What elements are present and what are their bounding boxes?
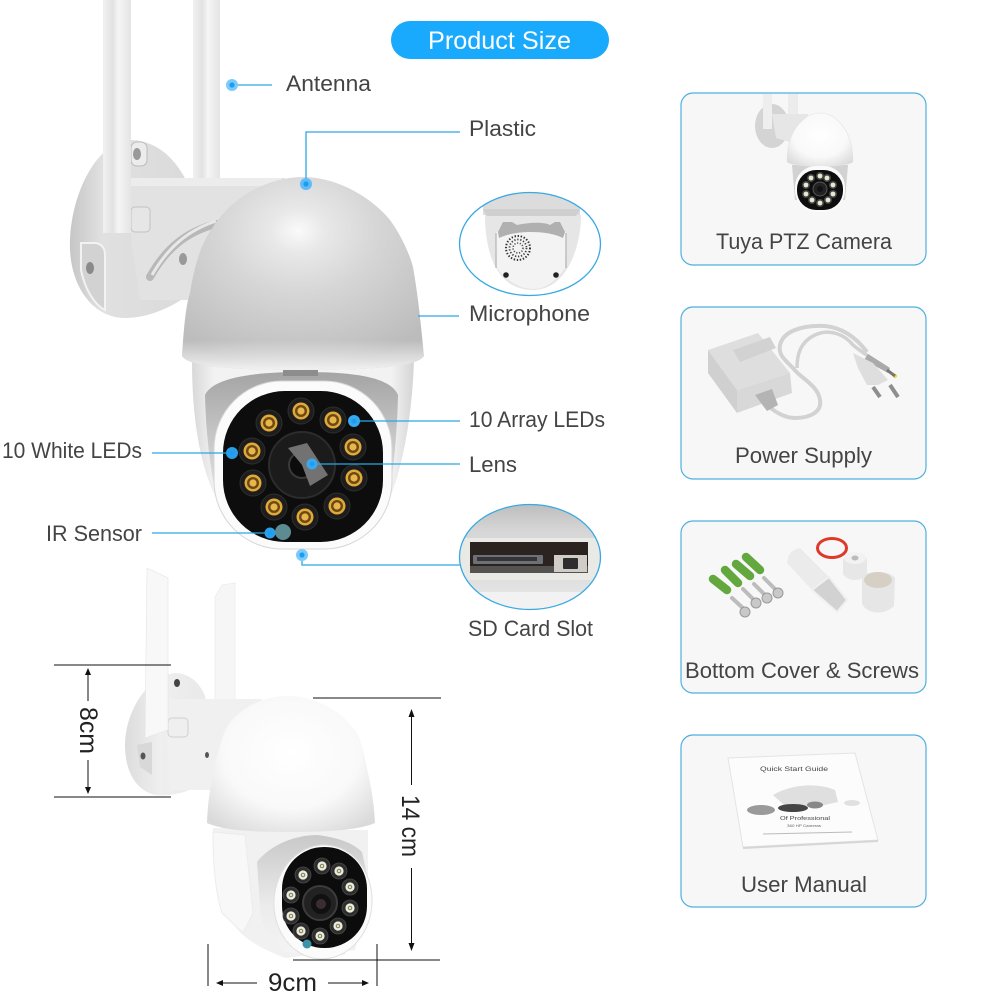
callout: white LEDs xyxy=(2,438,238,463)
screws and anchors image xyxy=(713,538,895,617)
callout: 10 array LEDs xyxy=(348,407,605,432)
IR sensor xyxy=(275,524,291,540)
back antenna xyxy=(215,583,235,700)
white LEDs ring xyxy=(239,398,367,530)
callout: plastic: Plastic xyxy=(469,116,536,141)
panel: Tuya PTZ camera xyxy=(681,93,926,265)
speaker holes xyxy=(506,236,530,260)
manual booklet image: Of Professional xyxy=(780,816,830,822)
callout: 10 array LEDs: 10 Array LEDs xyxy=(469,407,605,432)
panel: bottom cover and screws xyxy=(681,521,926,693)
mini camera image xyxy=(755,94,853,212)
wall mount plate xyxy=(70,0,285,318)
callout: plastic xyxy=(300,116,536,190)
panel: user manual: User Manual xyxy=(741,872,867,897)
callout: lens xyxy=(306,452,517,477)
product size pill heading xyxy=(391,21,609,59)
front antenna xyxy=(145,568,168,738)
manual booklet image: Quick Start Guide xyxy=(760,766,828,773)
dimension: 14 cm depth xyxy=(293,698,441,960)
panel: user manual xyxy=(681,735,926,907)
callout: SD card slot: SD Card Slot xyxy=(468,616,593,641)
dome shell xyxy=(182,177,424,370)
dimension: 8cm height: 8cm xyxy=(74,707,102,754)
panel: power supply xyxy=(681,307,926,479)
callout: IR sensor: IR Sensor xyxy=(46,521,142,546)
dimension: 14 cm depth: 14 cm xyxy=(396,795,424,857)
power adapter image xyxy=(708,326,898,418)
manual booklet image: 360 HP Cameras xyxy=(787,823,821,828)
panel: bottom cover and screws: Bottom Cover & Screws xyxy=(685,658,919,683)
callout: lens: Lens xyxy=(469,452,517,477)
panel: Tuya PTZ camera: Tuya PTZ Camera xyxy=(716,229,893,254)
dimension: 9cm width xyxy=(208,944,377,997)
dimension: 8cm height xyxy=(54,665,171,797)
callout: white LEDs: 10 White LEDs xyxy=(2,438,142,463)
dome xyxy=(207,696,375,832)
product size pill heading: Product Size xyxy=(428,27,571,55)
SD card slot detail oval xyxy=(458,504,602,612)
lens xyxy=(269,432,335,498)
antenna xyxy=(103,0,131,233)
callout: antenna: Antenna xyxy=(286,71,372,96)
microphone detail oval xyxy=(459,190,601,296)
camera lower body xyxy=(192,360,414,506)
panel: power supply: Power Supply xyxy=(735,443,872,468)
mount plate xyxy=(125,673,262,795)
main camera illustration xyxy=(70,0,424,549)
callout: SD card slot xyxy=(296,549,593,641)
dimension: 9cm width: 9cm xyxy=(268,969,317,997)
callout: microphone: Microphone xyxy=(469,301,590,326)
camera face with LEDs and lens xyxy=(214,381,392,549)
callout: antenna xyxy=(226,71,372,96)
callout: IR sensor xyxy=(46,521,276,546)
lower body and face xyxy=(213,828,377,963)
dimension camera illustration xyxy=(125,568,377,963)
manual booklet image xyxy=(728,753,878,849)
